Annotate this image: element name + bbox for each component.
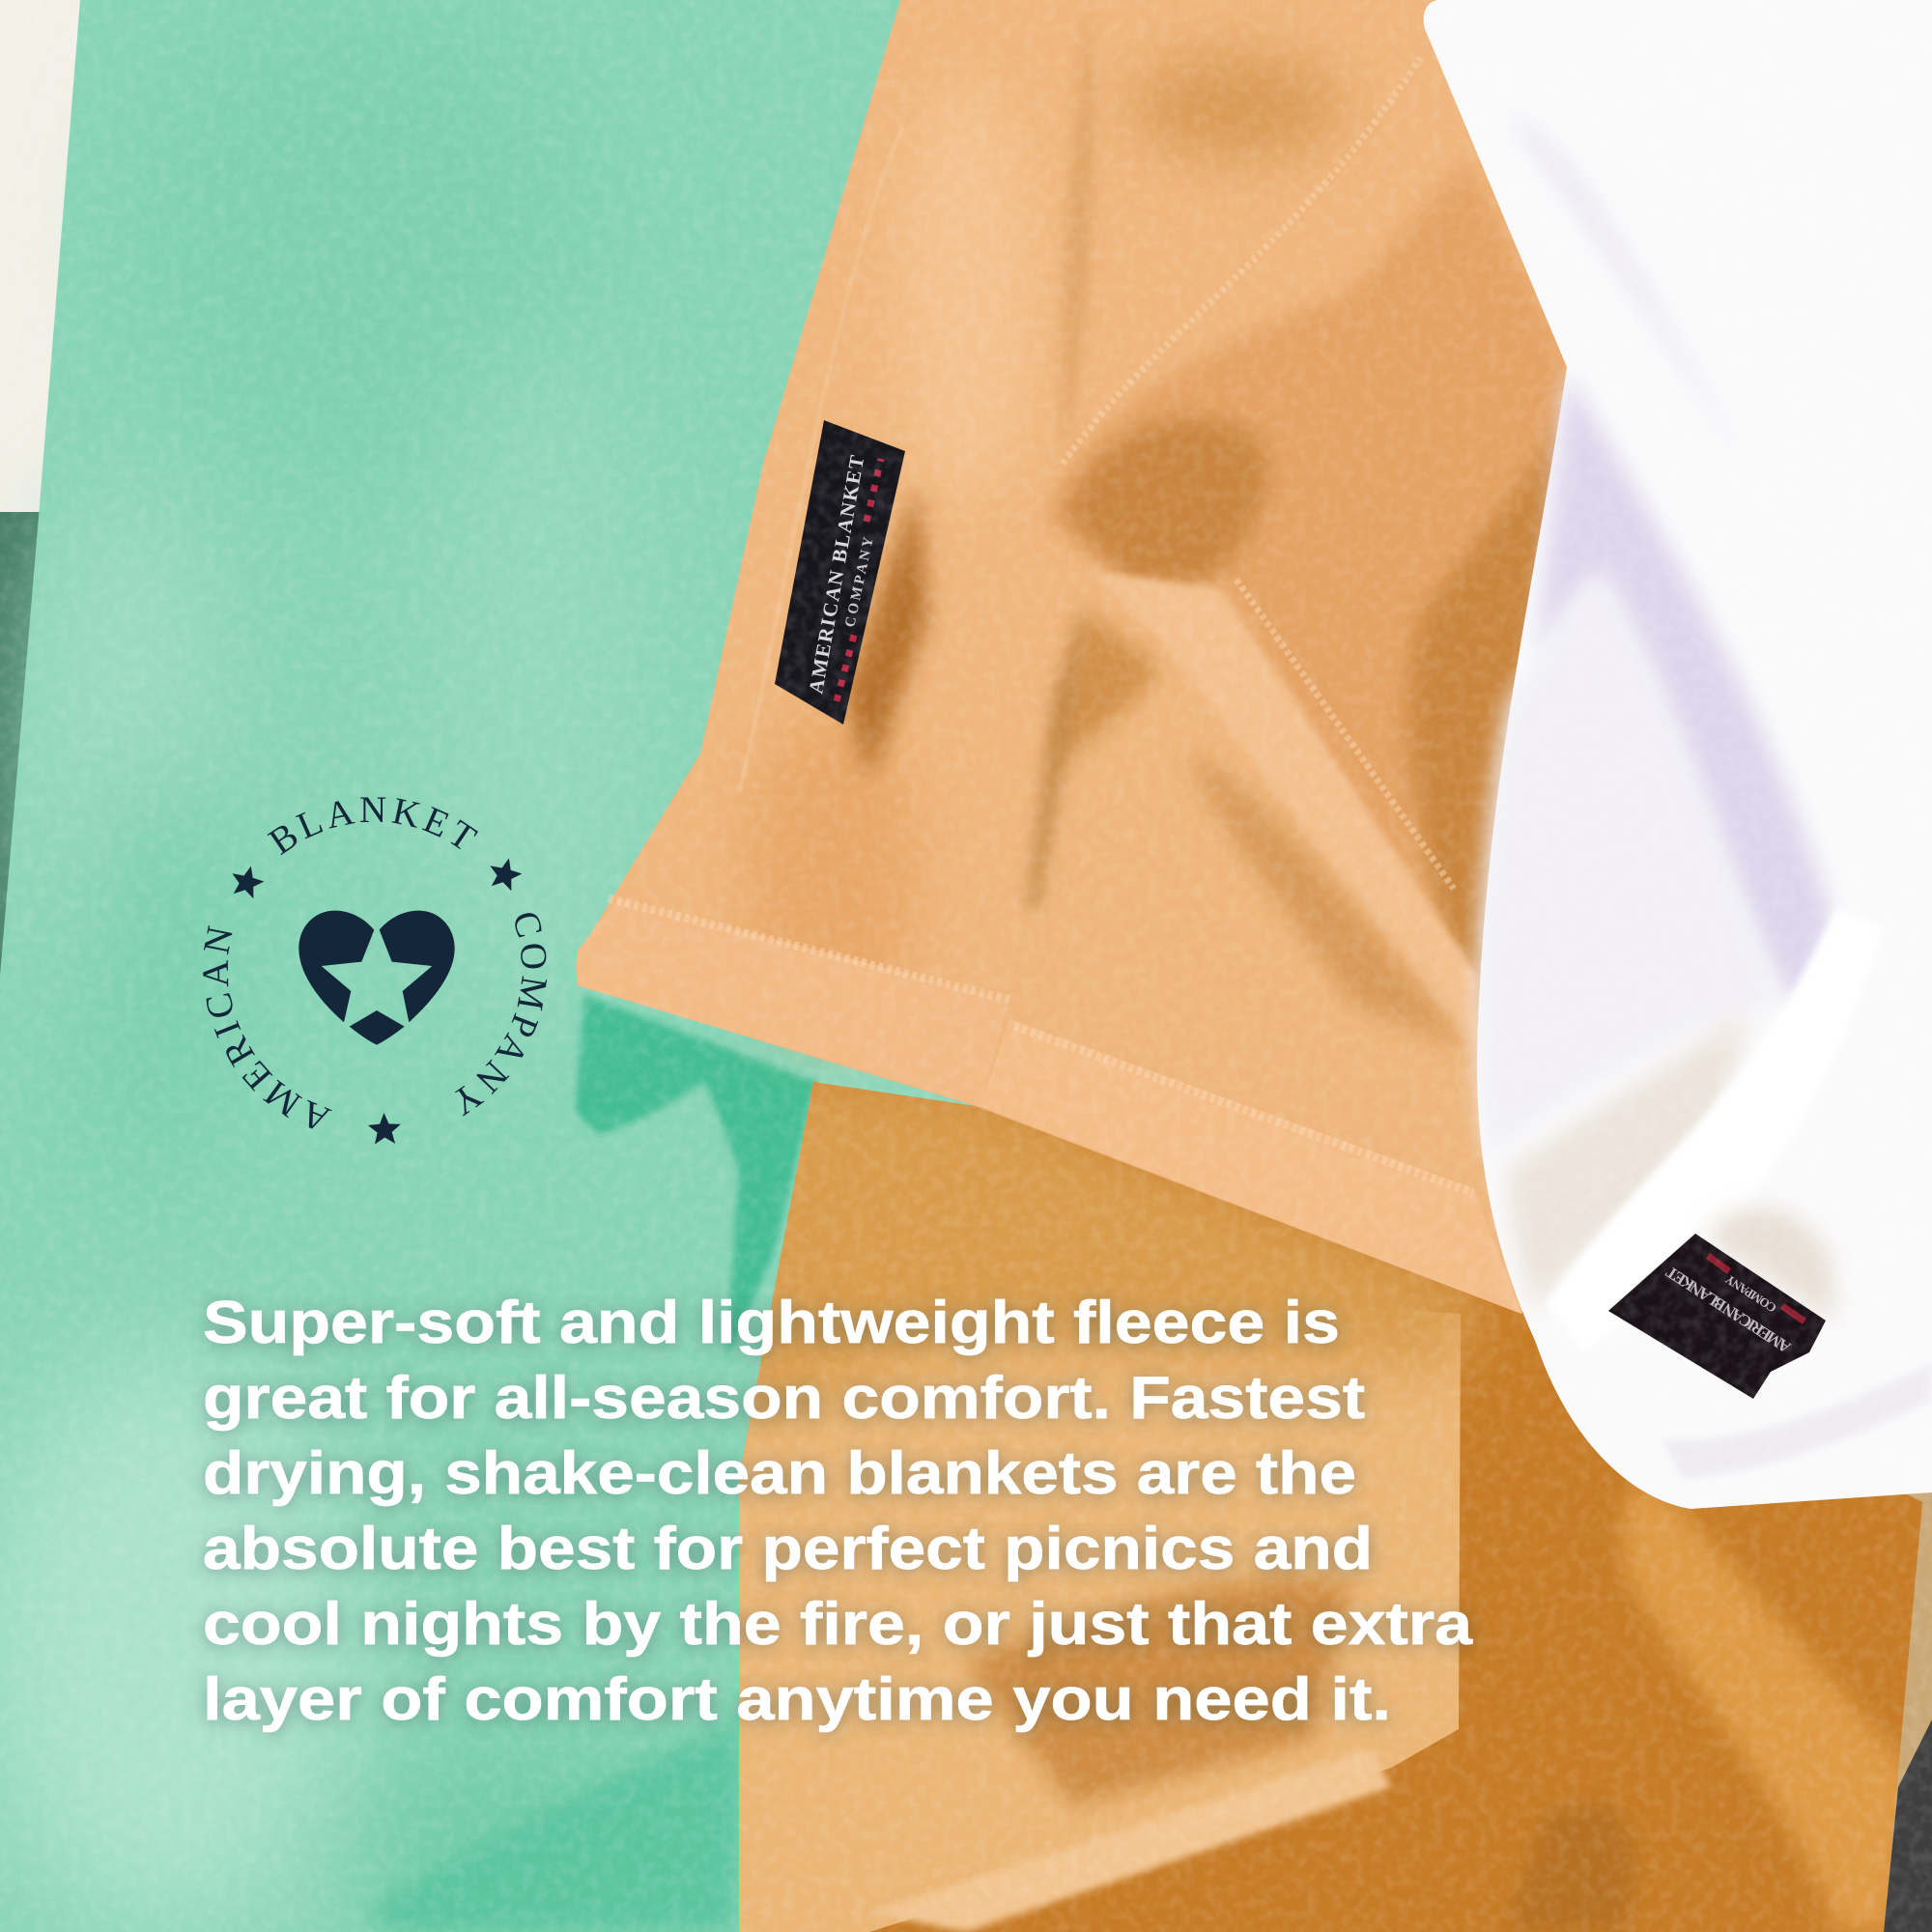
logo: American Blanket Company badge	[203, 798, 547, 1144]
background: white wall and dark green corner	[0, 0, 116, 1014]
crease: vertical panel edge	[1062, 0, 1093, 464]
text block: product description: cool nights by the fire, or just that extra	[203, 1591, 1473, 1658]
label: black woven tag on peach blanket: AMERICAN BLANKET	[804, 453, 868, 696]
blanket: white fleece	[1424, 0, 1932, 1509]
label: black tag on white blanket: AMERICAN BLANKET	[1662, 1263, 1794, 1357]
label: black woven tag on peach blanket: COMPANY	[842, 535, 877, 629]
text block: product description: great for all-season comfort. Fastest	[203, 1365, 1365, 1432]
text block: product description: Super-soft and lightweight fleece is	[203, 1290, 1340, 1356]
text block: product description: absolute best for perfect picnics and	[203, 1516, 1373, 1582]
stitching	[609, 898, 1009, 1000]
logo ring text: AMERICAN BLANKET COMPANY	[203, 798, 547, 1128]
crease: deep slit between panels	[1026, 601, 1086, 908]
logo stars	[228, 854, 525, 1145]
label: black tag on white blanket	[1608, 1234, 1826, 1399]
shadow: cast on mint blanket	[575, 995, 816, 1362]
hem	[577, 898, 1009, 1106]
fold shadow	[1048, 159, 1570, 1048]
label: black tag on white blanket: COMPANY	[1722, 1271, 1779, 1316]
white blanket lavender shadows	[1536, 372, 1835, 1009]
background: right corner ground	[1884, 1478, 1932, 1932]
text block: product description: layer of comfort anytime you need it.	[203, 1666, 1391, 1733]
text block: product description	[203, 1290, 1473, 1733]
blanket: peach fleece upper layer	[576, 0, 1575, 1314]
lower flap	[1087, 570, 1478, 1053]
text block: product description: drying, shake-clean blankets are the	[203, 1440, 1356, 1507]
blanket: mint green fleece	[0, 0, 927, 1932]
logo heart with star cut-out	[298, 911, 455, 1045]
label: black woven tag on peach blanket	[775, 420, 927, 782]
blanket: deep orange lower layer	[676, 1063, 1922, 1932]
